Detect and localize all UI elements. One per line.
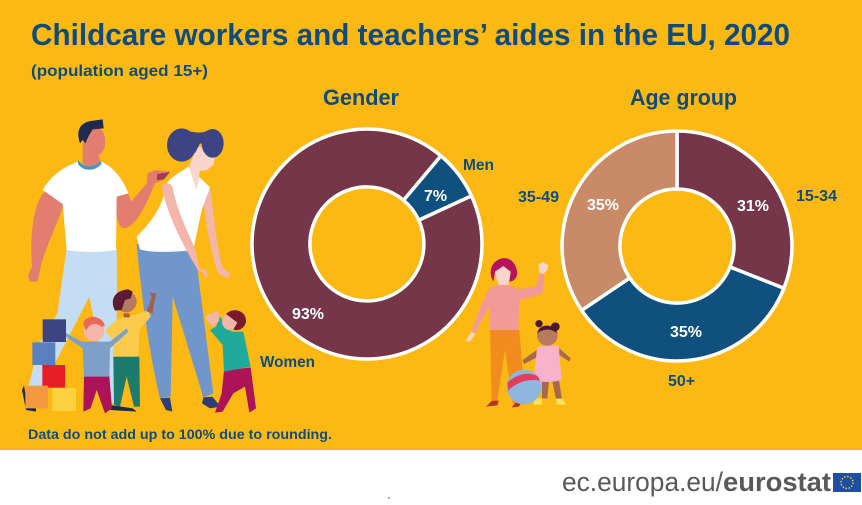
woman	[137, 128, 230, 412]
donut chart: age group	[562, 131, 792, 361]
label: 15-34: 15-34	[796, 188, 837, 205]
label: 50+: 50+	[668, 373, 695, 390]
value: 35-49 35%: 35%	[587, 197, 619, 214]
boy in yellow shirt	[105, 289, 157, 412]
man	[22, 119, 170, 412]
heading: age group: Age group	[630, 85, 737, 110]
value: women 93%: 93%	[292, 306, 324, 323]
segment: 15-34 31%	[677, 131, 792, 288]
toy blocks	[25, 319, 76, 411]
child in teal shirt	[205, 310, 256, 413]
segment: 35-49 35%	[562, 131, 677, 310]
label: 35-49: 35-49	[518, 189, 559, 206]
illustration: woman and girl with ball	[466, 258, 571, 407]
label: women: Women	[260, 354, 315, 371]
icon: EU flag	[833, 473, 861, 492]
toddler in blue shirt	[63, 317, 128, 413]
subtitle: (population aged 15+)	[31, 63, 208, 80]
label: men: Men	[463, 157, 494, 174]
title: Childcare workers and teachers’ aides in the EU, 2020	[31, 17, 790, 52]
segment: men 7%	[404, 156, 471, 220]
value: 50+ 35%: 35%	[670, 324, 702, 341]
illustration: family with children and blocks	[22, 119, 256, 413]
woman waving	[466, 258, 548, 407]
segment: 50+ 35%	[582, 267, 784, 361]
heading: gender: Gender	[323, 85, 399, 110]
footnote: Data do not add up to 100% due to rounding.	[28, 426, 332, 442]
eurostat wordmark: eurostat	[723, 467, 831, 497]
value: 15-34 31%: 31%	[737, 198, 769, 215]
donut chart: gender	[252, 129, 482, 359]
eurostat url: ec.europa.eu/	[562, 467, 723, 497]
ball	[507, 370, 541, 404]
segment: women 93%	[252, 129, 482, 359]
value: men 7%: 7%	[424, 188, 447, 205]
girl	[523, 320, 571, 405]
